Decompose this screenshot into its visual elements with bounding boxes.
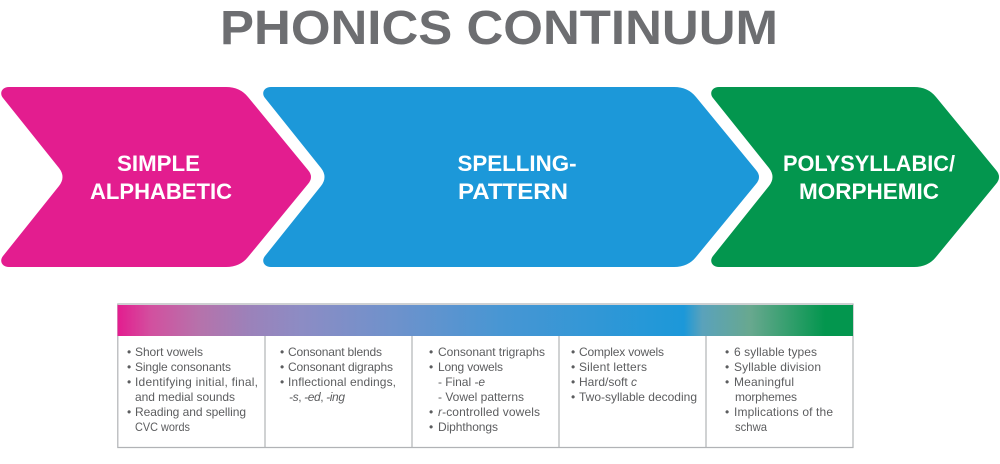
column 4 text: •	[571, 390, 575, 404]
column 3 text: - Vowel patterns	[438, 390, 524, 404]
column 5 text: 6 syllable types	[734, 345, 817, 359]
column 4 text: Silent letters	[579, 360, 647, 374]
column 1 text: Reading and spelling	[135, 405, 246, 419]
column 1 text: •	[127, 375, 131, 389]
column 1 text: •	[127, 405, 131, 419]
column 5 text: Implications of the	[734, 405, 833, 419]
column 1 text: Identifying initial, final,	[135, 375, 258, 389]
continuum table	[118, 304, 853, 448]
column 3 text: •	[429, 360, 433, 374]
column 2 text: Consonant blends	[288, 345, 382, 359]
column 2 text: •	[280, 360, 284, 374]
column 4 text: Two-syllable decoding	[579, 390, 697, 404]
chevron: polysyllabic/morphemic: POLYSYLLABIC/	[783, 151, 955, 176]
column 1 text: Short vowels	[135, 345, 203, 359]
chevron: simple alphabetic: SIMPLE	[117, 151, 200, 176]
column 3 text: - Final -e	[438, 375, 485, 389]
column 2 text: -s, -ed, -ing	[289, 390, 345, 404]
column 4 text: •	[571, 375, 575, 389]
title: PHONICS CONTINUUM	[220, 2, 778, 55]
column 2 text: •	[280, 345, 284, 359]
column 1 text: •	[127, 360, 131, 374]
column 1 text: Single consonants	[135, 360, 231, 374]
column 4 text: Hard/soft c	[579, 375, 637, 389]
column 3 text	[429, 345, 545, 434]
column 4 text: •	[571, 360, 575, 374]
column 2 text: •	[280, 375, 284, 389]
chevron: simple alphabetic	[1, 87, 311, 267]
chevron: simple alphabetic: ALPHABETIC	[90, 179, 232, 204]
column 2 text: Inflectional endings,	[288, 375, 396, 389]
column 3 text: •	[429, 420, 433, 434]
chevron: spelling-pattern: PATTERN	[458, 179, 568, 204]
column 3 text: •	[429, 345, 433, 359]
column 5 text: •	[725, 405, 729, 419]
column 5 text: morphemes	[735, 390, 797, 404]
column 3 text: r-controlled vowels	[438, 405, 540, 419]
column 2 text: Consonant digraphs	[288, 360, 393, 374]
column 1 text: •	[127, 345, 131, 359]
column 5 text: Meaningful	[734, 375, 794, 389]
column 2 text	[280, 345, 396, 404]
column 5 text: •	[725, 345, 729, 359]
column 4 text	[571, 345, 697, 404]
column 1 text	[127, 345, 258, 434]
chevron: polysyllabic/morphemic	[711, 87, 999, 267]
column 3 text: Diphthongs	[438, 420, 498, 434]
column 3 text: Long vowels	[438, 360, 503, 374]
column 4 text: •	[571, 345, 575, 359]
chevron: polysyllabic/morphemic: MORPHEMIC	[799, 179, 939, 204]
column 5 text: Syllable division	[734, 360, 821, 374]
chevron: spelling-pattern: SPELLING-	[458, 151, 576, 176]
gradient bar	[118, 305, 853, 336]
column 3 text: Consonant trigraphs	[438, 345, 545, 359]
column 3 text: •	[429, 405, 433, 419]
column 1 text: and medial sounds	[135, 390, 235, 404]
column 5 text	[725, 345, 833, 434]
chevron: spelling-pattern	[263, 87, 759, 267]
column 1 text: CVC words	[135, 420, 190, 434]
column 5 text: •	[725, 360, 729, 374]
table grid	[118, 304, 853, 448]
column 5 text: •	[725, 375, 729, 389]
column 4 text: Complex vowels	[579, 345, 664, 359]
column 5 text: schwa	[735, 420, 767, 434]
